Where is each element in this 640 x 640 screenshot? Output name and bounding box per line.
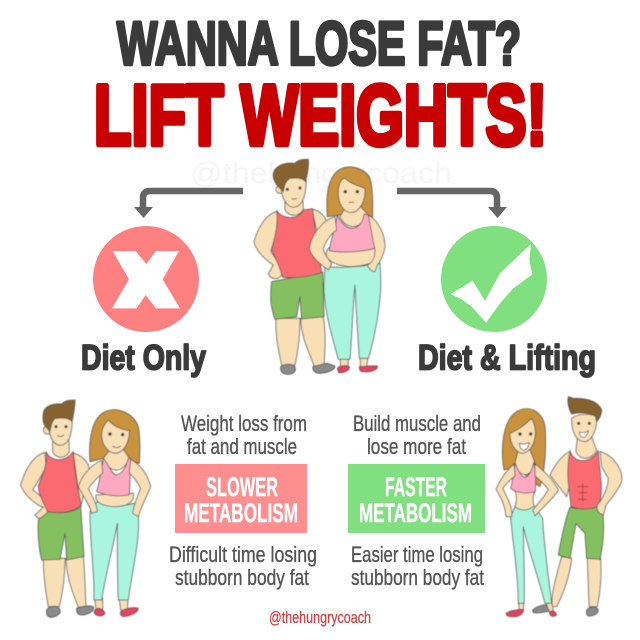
icon: red circle with X — [93, 226, 199, 332]
arrow: to diet only — [143, 191, 243, 208]
text: difficult time losing stubborn body fat — [169, 542, 317, 590]
panel: slower metabolism: SLOWER — [206, 472, 278, 502]
text: weight loss from fat and muscle — [181, 411, 307, 459]
panel: slower metabolism — [175, 464, 307, 533]
label: diet only: Diet Only — [81, 338, 206, 378]
text: weight loss from fat and muscle: Weight loss from — [181, 411, 307, 436]
text: weight loss from fat and muscle: fat and muscle — [187, 434, 297, 459]
panel: faster metabolism: FASTER — [385, 472, 447, 502]
label: diet and lifting: Diet & Lifting — [418, 338, 596, 378]
footer handle: @thehungrycoach — [269, 608, 371, 627]
arrow: to diet and lifting — [397, 191, 497, 208]
text: easier time losing stubborn body fat: Easier time losing — [351, 542, 483, 567]
panel: faster metabolism: METABOLISM — [359, 498, 472, 528]
panel: slower metabolism: METABOLISM — [184, 498, 298, 528]
text: difficult time losing stubborn body fat: stubborn body fat — [175, 565, 309, 590]
text: build muscle and lose more fat: lose more fat — [367, 434, 466, 459]
text: easier time losing stubborn body fat — [351, 542, 484, 590]
illustration: couple after diet and lifting — [496, 397, 622, 617]
text: build muscle and lose more fat: Build muscle and — [353, 411, 481, 436]
text: easier time losing stubborn body fat: stubborn body fat — [351, 565, 484, 590]
illustration: overweight couple — [254, 159, 385, 374]
panel: faster metabolism — [348, 464, 485, 533]
icon: green circle with check — [441, 226, 547, 332]
watermark: @thehungrycoach — [190, 157, 452, 190]
illustration: couple after diet only — [21, 400, 151, 617]
text: difficult time losing stubborn body fat: Difficult time losing — [169, 542, 317, 567]
text: build muscle and lose more fat — [353, 411, 481, 459]
